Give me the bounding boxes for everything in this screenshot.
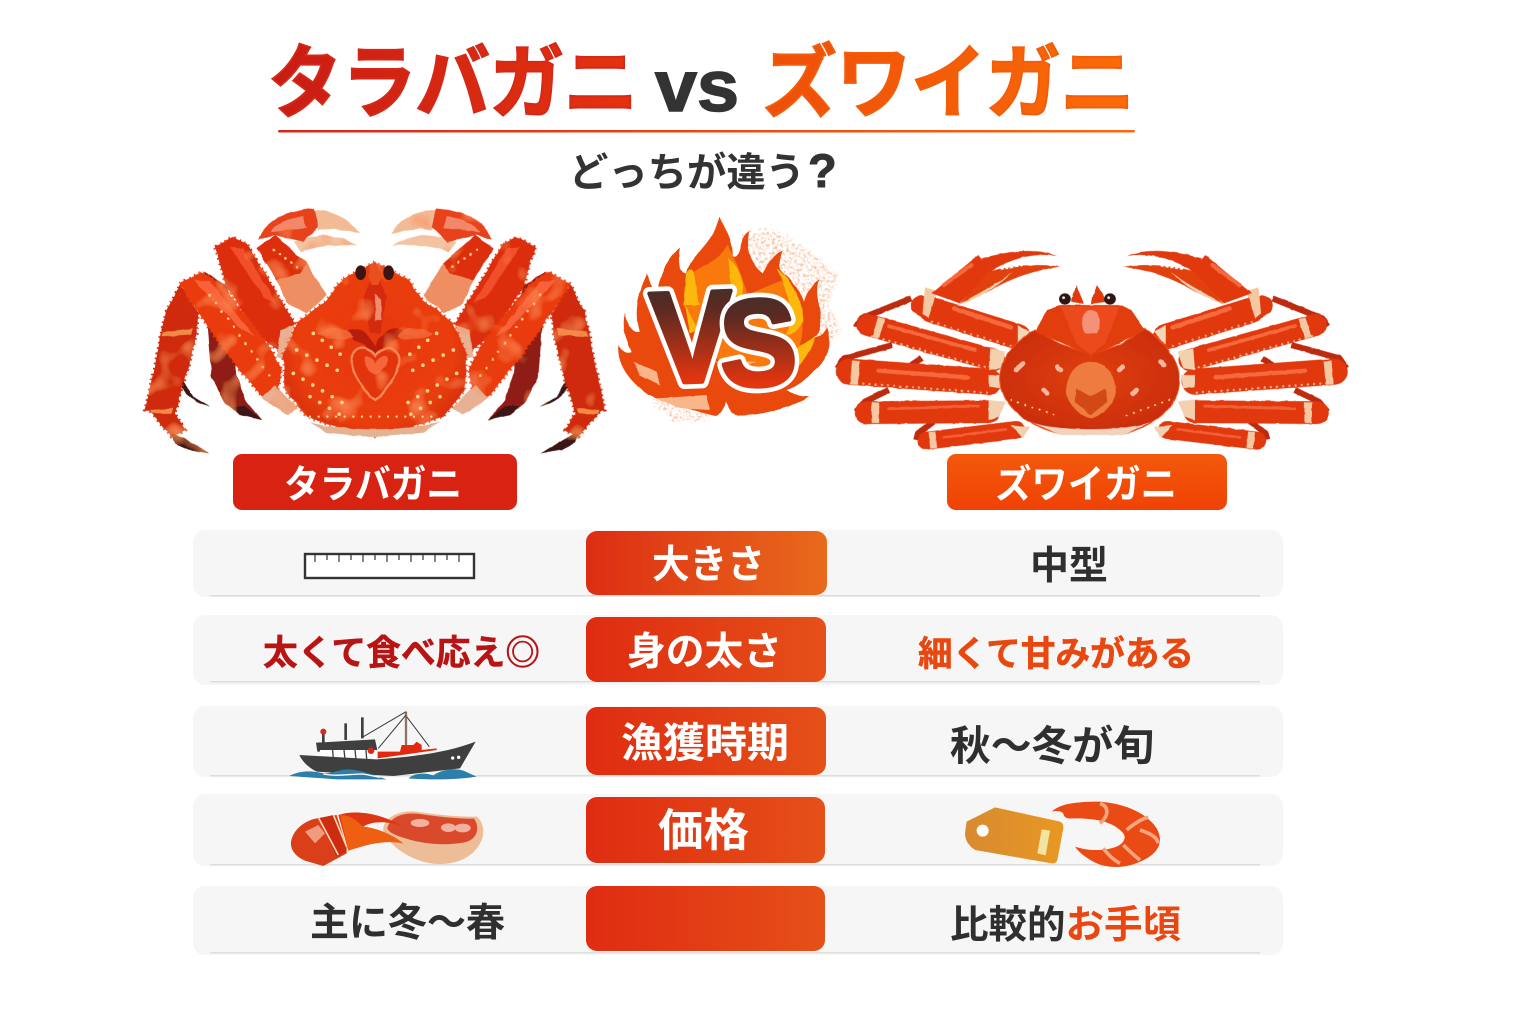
illustration: king crab (145, 208, 605, 453)
title: vs: vs (655, 47, 739, 127)
value: 主に冬〜春: 主に冬〜春 (310, 892, 505, 948)
flame body (618, 217, 830, 416)
pill: 価格: 価格 (658, 794, 749, 859)
letter S: S (717, 273, 799, 414)
VS lettering (647, 260, 799, 416)
letter V: V (647, 263, 736, 412)
row: empty label (193, 886, 1283, 955)
value: 中型: 中型 (1030, 535, 1108, 591)
row: 身の太さ (193, 615, 1283, 685)
snow crab eyes (1059, 293, 1116, 305)
flame splatter (650, 228, 843, 422)
value: 太くて食べ応え◎: 太くて食べ応え◎ (263, 625, 540, 676)
pill: 漁獲時期 (586, 707, 826, 775)
value: 細くて甘みがある: 細くて甘みがある (918, 626, 1194, 677)
letter S: S (717, 273, 799, 414)
title: タラバガニ: タラバガニ (268, 19, 638, 135)
row: 大きさ (193, 530, 1283, 597)
pill: 大きさ: 大きさ (652, 534, 765, 590)
pill: 大きさ (586, 531, 827, 595)
row: 価格 (193, 794, 1283, 867)
value: 比較的お手頃: 比較的お手頃 (950, 894, 1181, 950)
pill: 身の太さ: 身の太さ (627, 621, 782, 677)
king crab rostrum and eyes (355, 261, 394, 285)
icon: price tag and crab leg (965, 802, 1160, 867)
pill: empty (586, 886, 825, 951)
king crab limbs and shell (145, 208, 605, 453)
title: ズワイガニ: ズワイガニ (762, 19, 1135, 135)
title underline (278, 130, 1135, 132)
king crab spots (293, 333, 457, 417)
title (268, 19, 1135, 135)
badge: タラバガニ: タラバガニ (284, 454, 462, 510)
badge: ズワイガニ (947, 454, 1227, 510)
icon: fishing boat (289, 712, 477, 779)
badge: ズワイガニ: ズワイガニ (995, 454, 1177, 510)
subtitle: どっちが違う (569, 140, 805, 198)
pill: 価格 (586, 794, 825, 863)
letter V: V (647, 263, 736, 412)
badge: タラバガニ (233, 454, 517, 510)
row: 漁獲時期 (193, 706, 1283, 779)
icon: ruler (305, 554, 474, 578)
value: 秋〜冬が旬: 秋〜冬が旬 (950, 712, 1154, 772)
snow crab limbs and shell (837, 251, 1346, 441)
subtitle question mark: ? (808, 144, 837, 197)
king crab rim spots (310, 413, 440, 420)
pill: 身の太さ (586, 617, 826, 682)
illustration: VS flame (618, 217, 843, 422)
illustration: snow crab (837, 251, 1346, 441)
pill: 漁獲時期: 漁獲時期 (621, 709, 789, 769)
icon: crab leg and meat (291, 811, 483, 866)
